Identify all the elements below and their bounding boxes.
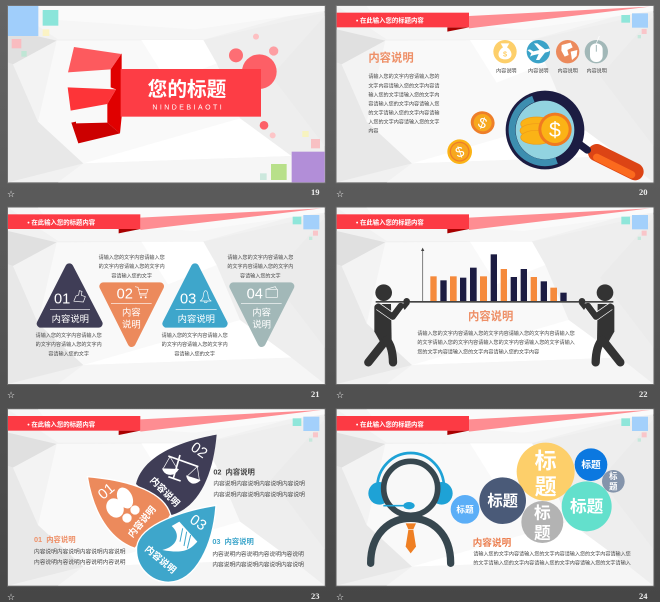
text block below 01: 的文字内容请输入您的文字内: [36, 341, 102, 348]
bubbles: 标: [535, 448, 557, 473]
icon: magnifier with coins: $: [549, 118, 561, 142]
panel: slide 21: [7, 207, 326, 401]
petal 03: 内容说明: [143, 543, 179, 575]
bubbles: 题: [609, 482, 618, 492]
text block above 04: 请输入您的文字内容请输入您: [227, 254, 293, 261]
text block above 04: 容请输入您的文字: [240, 272, 281, 279]
triangle 01: [41, 267, 99, 324]
footer: page 21: [7, 389, 320, 401]
text block: 请输入您的文字内容请输入您的: [368, 73, 439, 80]
text block above 04: 的文字内容请输入您的文字内: [227, 263, 293, 270]
heading: 内容说明: [468, 309, 513, 323]
icon: magnifier with coins: [506, 91, 635, 175]
text block below 03: 的文字内容请输入您的文字内: [162, 341, 228, 348]
triangle 01: 01: [54, 292, 70, 308]
header label: • 在此输入您的标题内容: [27, 217, 96, 226]
icon: customer service person: [368, 453, 453, 563]
icon: left person: [368, 284, 410, 362]
text block: 内容: [368, 128, 378, 135]
title banner: [121, 69, 261, 117]
icon labels: 内容说明: [587, 67, 607, 74]
text block below 03: 请输入您的文字内容请输入您: [162, 332, 228, 339]
footer: page 21: 21: [311, 389, 320, 399]
footer: page 20: 20: [639, 187, 648, 197]
petal 02: [136, 435, 217, 515]
footer: page 24: 24: [639, 591, 648, 601]
header label: • 在此输入您的标题内容: [356, 217, 424, 226]
text block: 容请输入您的文字内容请输入您: [368, 100, 439, 107]
heading: 内容说明: [368, 51, 414, 65]
text block 03: 03 内容说明: [212, 537, 254, 546]
footer: page 22: [336, 389, 648, 401]
text block 02: [213, 467, 305, 498]
petal 01: 01: [95, 480, 118, 503]
icon: money bag: $: [503, 50, 507, 59]
bubbles: 题: [535, 474, 557, 499]
decorative circles: [229, 34, 278, 138]
triangle 04: [233, 286, 290, 343]
text block: [417, 330, 575, 355]
text block 01: 01 内容说明: [34, 535, 76, 544]
petal 02: 内容说明: [148, 474, 182, 509]
icon: small coin: [468, 108, 498, 137]
header label: • 在此输入您的标题内容: [27, 419, 96, 428]
petal 01: 内容说明: [125, 504, 158, 539]
triangle 04: 说明: [252, 318, 271, 329]
bubbles: [451, 443, 625, 543]
text block below 01: 请输入您的文字内容请输入您: [36, 332, 102, 339]
footer: page 22: ☆: [336, 391, 344, 401]
text block 02: 02 内容说明: [213, 467, 255, 476]
header label: • 在此输入您的标题内容: [356, 419, 424, 428]
icon: small coin: $: [476, 115, 489, 133]
text block above 02: 容请输入您的文字: [111, 272, 152, 279]
text block: [368, 73, 439, 135]
triangle 02: 内容: [122, 307, 141, 318]
corner squares: [8, 6, 325, 182]
footer: page 24: [336, 591, 648, 602]
triangle 02: [103, 286, 160, 343]
bubbles: 标题: [581, 459, 601, 471]
header label: • 在此输入您的标题内容: [356, 16, 424, 25]
icon labels: 内容说明: [496, 67, 516, 74]
icon labels: 内容说明: [528, 67, 548, 74]
text block below 01: 容请输入您的文字: [48, 350, 89, 357]
text block: 入您的文字内容请输入您的文字: [368, 119, 439, 126]
footer: page 20: ☆: [336, 190, 344, 200]
icon: small coin: [444, 136, 475, 167]
petal 03: [137, 505, 216, 582]
heading: 内容说明: [473, 537, 512, 549]
text block: 的文字请输入您的文字内容请输入您的文字内容请输入您的文字请输入: [473, 560, 631, 567]
triangle 03: 03: [180, 292, 196, 308]
bubbles: 标: [609, 471, 618, 481]
text block: 请输入您的文字内容请输入您的文字内容请输入您的文字内容请输入您: [417, 330, 575, 337]
text block 02: 内容说明内容说明内容说明内容说明: [213, 480, 305, 488]
footer: page 23: 23: [311, 591, 320, 601]
text block: 输入您的文字请输入您的文字内: [368, 91, 439, 98]
footer: page 21: ☆: [7, 391, 15, 401]
icon: mouse: [585, 36, 608, 63]
triangle 04: 内容: [252, 307, 271, 318]
title banner: NINDEBIAOTI: [152, 105, 222, 112]
triangle 02: 02: [117, 286, 133, 302]
icon: right person: [579, 284, 620, 362]
text block above 02: [99, 254, 165, 279]
triangle 04: 04: [247, 286, 263, 302]
text block above 02: 请输入您的文字内容请输入您: [99, 254, 165, 261]
text block below 01: [36, 332, 102, 357]
panel: slide 22: [336, 207, 654, 401]
text block: 您的文字内容请输入您的文字内容请输入您的文字内容: [417, 348, 539, 355]
text block below 03: [162, 332, 228, 357]
text block above 04: [227, 254, 293, 279]
panel: slide 23: [7, 408, 326, 602]
text block: 请输入您的文字内容请输入您的文字内容请输入您的文字内容请输入您: [473, 550, 631, 557]
icon labels: 内容说明: [558, 67, 578, 74]
footer: page 19: ☆: [7, 190, 15, 200]
triangle 01: 内容说明: [52, 313, 89, 324]
icon: folded ribbon number 3: [68, 47, 122, 143]
icon: globe: [556, 40, 579, 63]
footer: page 20: [336, 187, 648, 200]
petal 01: [87, 477, 171, 548]
icon labels: [496, 67, 607, 74]
footer: page 23: [7, 591, 320, 602]
text block 01: 内容说明内容说明内容说明内容说明: [34, 547, 126, 555]
text block 03: [212, 537, 304, 569]
text block 03: 内容说明内容说明内容说明内容说明: [212, 561, 304, 569]
panel: slide 20: [336, 5, 654, 200]
text block above 02: 的文字内容请输入您的文字内: [99, 263, 165, 270]
bubbles: 题: [534, 523, 551, 542]
text block 02: 内容说明内容说明内容说明内容说明: [213, 490, 305, 498]
text block: [473, 550, 631, 567]
petal 03: 03: [186, 512, 209, 534]
footer: page 19: [7, 187, 320, 200]
bubbles: 标题: [487, 493, 518, 510]
triangle 03: [166, 267, 224, 324]
text block 01: 内容说明内容说明内容说明内容说明: [34, 558, 126, 566]
icon: plane: [527, 40, 550, 63]
triangle 03: 内容说明: [178, 313, 215, 324]
icon: money bag: [493, 40, 517, 63]
bar chart: [376, 248, 613, 303]
panel: slide 24: [336, 408, 654, 602]
panel: slide 19 cover: [7, 5, 326, 200]
text block 01: [34, 535, 126, 566]
bubbles: 标: [534, 503, 551, 522]
text block: 的文字请输入您的文字内容请输入您的文字内容请输入您的文字请输入: [417, 339, 575, 346]
title banner: 您的标题: [148, 79, 227, 101]
text block: 的文字请输入您的文字内容请输: [368, 110, 439, 117]
petal 02: 02: [187, 440, 210, 462]
text block: 文字内容请输入您的文字内容请: [368, 82, 439, 89]
text block below 03: 容请输入您的文字: [174, 350, 215, 357]
footer: page 22: 22: [639, 389, 648, 399]
icon: small coin: $: [454, 144, 467, 162]
text block 03: 内容说明内容说明内容说明内容说明: [212, 550, 304, 558]
footer: page 19: 19: [311, 187, 320, 197]
triangle 02: 说明: [122, 318, 141, 329]
bubbles: 标题: [570, 497, 604, 516]
bubbles: 标题: [456, 503, 474, 514]
